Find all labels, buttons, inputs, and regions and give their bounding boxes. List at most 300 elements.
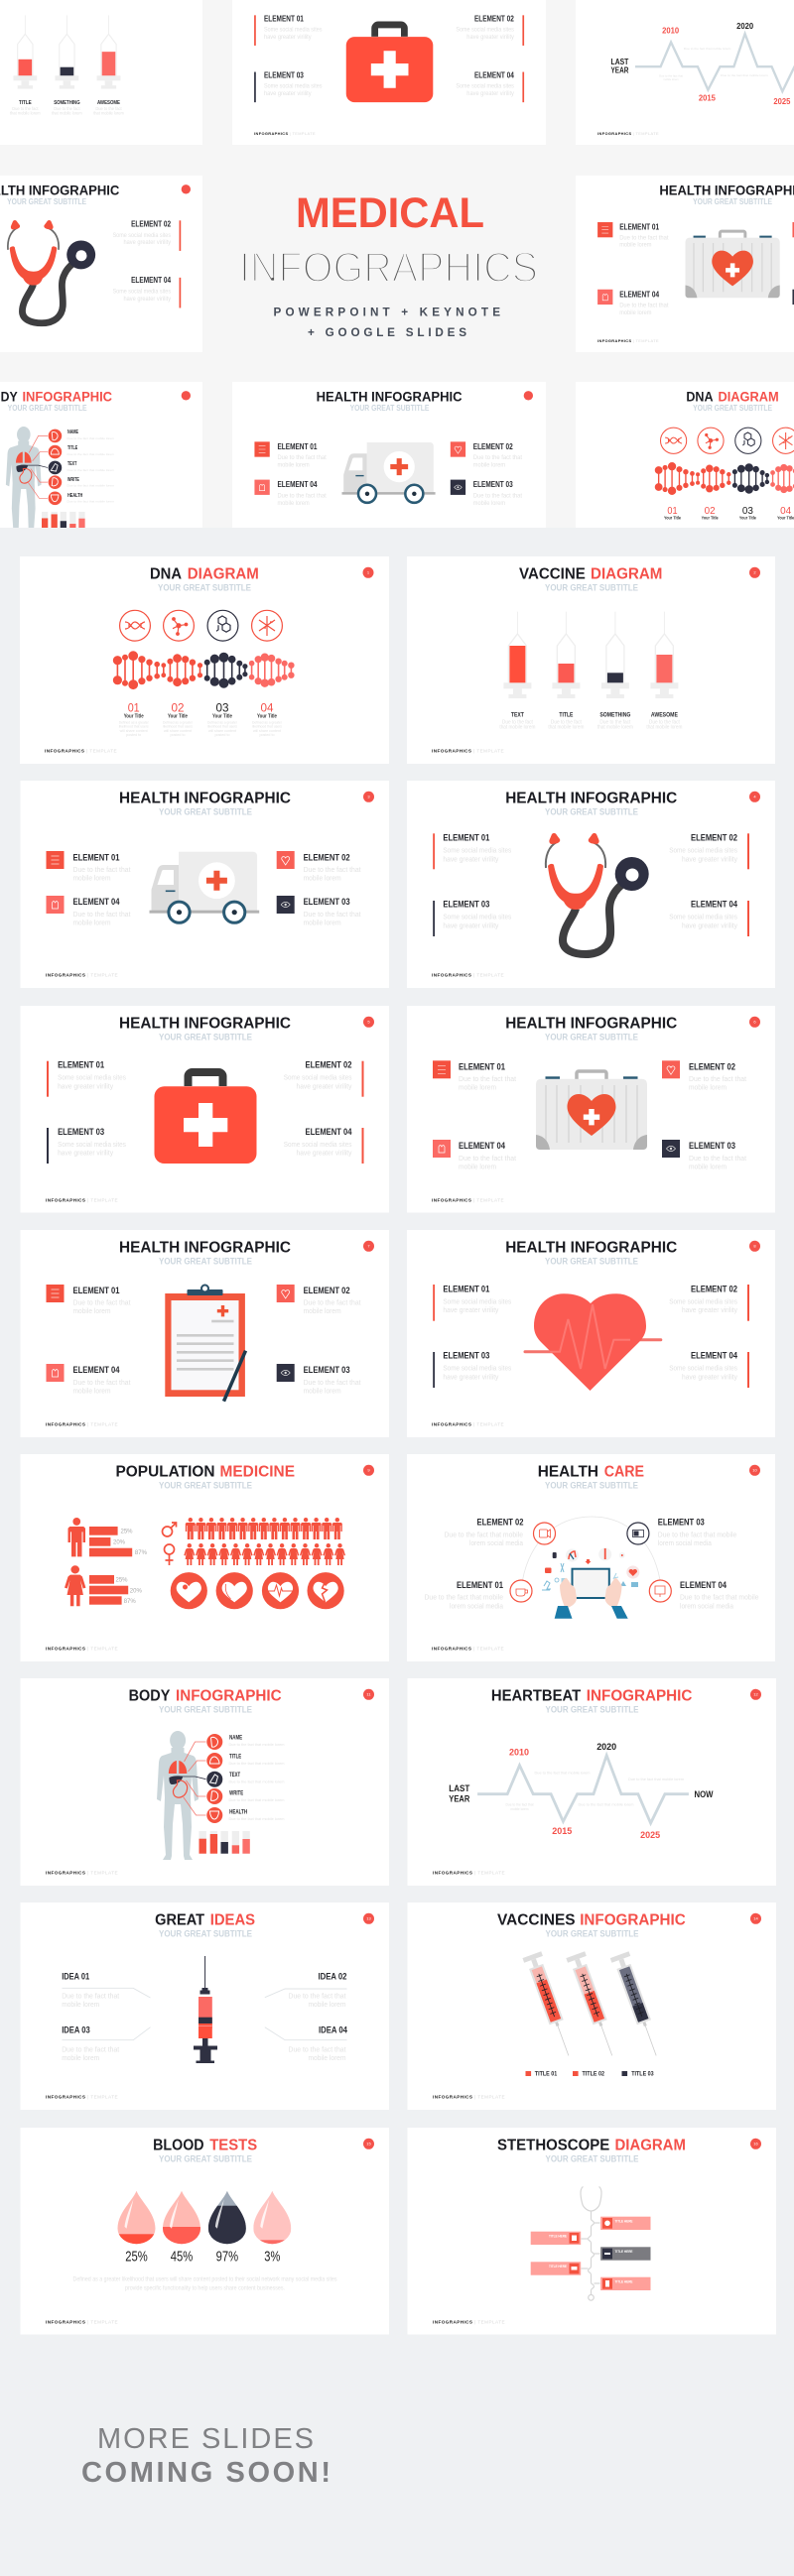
preview: heartbeat slide crop: Due to the fact that bbox=[659, 73, 683, 77]
heading bbox=[505, 791, 677, 816]
preview: suitcase slide crop: INFOGRAPHICS bbox=[597, 338, 631, 343]
preview: DNA slide crop: 04 bbox=[780, 506, 791, 517]
preview: ambulance slide crop: mobile lorem bbox=[277, 500, 310, 507]
clipboard illustration bbox=[165, 1286, 246, 1402]
stethoscope tube bbox=[581, 2186, 601, 2300]
idea texts: IDEA 01 bbox=[62, 1972, 89, 1982]
idea texts: mobile lorem bbox=[62, 2000, 99, 2009]
page number badge bbox=[363, 1017, 374, 1028]
page number badge bbox=[363, 1913, 374, 1924]
preview: heartbeat slide crop: | TEMPLATE bbox=[633, 131, 659, 136]
heading: DNA bbox=[150, 566, 182, 583]
page number badge: 8 bbox=[753, 1244, 756, 1249]
female bars: 87% bbox=[124, 1599, 136, 1605]
heading: BLOOD bbox=[153, 2138, 204, 2154]
heading: YOUR GREAT SUBTITLE bbox=[159, 1032, 252, 1042]
preview: stethoscope slide crop: have greater virility bbox=[123, 296, 172, 303]
preview: suitcase slide crop: Due to the fact that bbox=[619, 235, 669, 242]
element texts: mobile lorem bbox=[73, 919, 111, 927]
page number badge bbox=[750, 2139, 761, 2149]
preview: ambulance slide crop: YOUR GREAT SUBTITLE bbox=[350, 404, 429, 413]
footer: | TEMPLATE bbox=[87, 2095, 118, 2100]
element texts: ELEMENT 03 bbox=[58, 1127, 104, 1137]
title: INFOGRAPHICS: INFOGRAPHICS bbox=[239, 244, 538, 292]
page number badge: 10 bbox=[752, 1468, 757, 1473]
idea texts: IDEA 03 bbox=[62, 2025, 90, 2035]
element texts: Some social media sites bbox=[443, 1296, 511, 1305]
element texts: ELEMENT 02 bbox=[304, 1286, 350, 1295]
element texts: have greater virility bbox=[682, 854, 737, 863]
slide 15: blood tests bbox=[20, 2128, 389, 2335]
step labels: posted to bbox=[171, 733, 185, 737]
element texts: Some social media sites bbox=[443, 913, 511, 921]
step labels: 01 bbox=[128, 700, 140, 714]
heading: HEALTH INFOGRAPHIC bbox=[119, 1240, 291, 1257]
timeline labels: 2025 bbox=[640, 1830, 661, 1841]
element texts: lorem social media bbox=[658, 1538, 712, 1547]
slide 1: DNA diagram bbox=[20, 556, 389, 764]
preview: DNA slide crop: Your Title bbox=[702, 515, 719, 520]
footer bbox=[46, 2320, 118, 2325]
step labels: 04 bbox=[260, 700, 274, 714]
footer: | TEMPLATE bbox=[473, 1422, 504, 1427]
preview: DNA slide crop bbox=[576, 382, 794, 528]
preview: first aid kit slide crop bbox=[232, 0, 546, 145]
preview: vaccine slide crop bbox=[0, 0, 202, 145]
footer bbox=[432, 973, 504, 978]
element texts: lorem social media bbox=[469, 1538, 524, 1547]
footer bbox=[433, 2320, 505, 2325]
heading: HEALTH INFOGRAPHIC bbox=[119, 791, 291, 807]
heading: YOUR GREAT SUBTITLE bbox=[545, 806, 638, 816]
percentages: 97% bbox=[216, 2250, 238, 2266]
page number badge: 6 bbox=[753, 1020, 756, 1025]
preview: first aid kit slide crop: Some social media sites bbox=[264, 83, 322, 90]
preview: first aid kit slide crop: ELEMENT 04 bbox=[474, 70, 514, 79]
step labels: Defined as a greater bbox=[163, 721, 194, 725]
element texts bbox=[58, 1060, 352, 1158]
preview: suitcase slide crop: Due to the fact that bbox=[619, 303, 669, 309]
footer: INFOGRAPHICS bbox=[432, 973, 471, 978]
heading: VACCINES bbox=[497, 1912, 576, 1929]
percentages: 3% bbox=[264, 2250, 280, 2266]
preview: ambulance slide crop: Due to the fact that bbox=[277, 454, 327, 461]
heading: INFOGRAPHIC bbox=[176, 1688, 282, 1705]
heading bbox=[150, 566, 259, 592]
element texts: Due to the fact that mobile bbox=[425, 1593, 503, 1602]
preview: heartbeat slide crop: 2020 bbox=[736, 22, 754, 31]
preview: ambulance slide crop: HEALTH INFOGRAPHIC bbox=[317, 389, 463, 404]
heading: YOUR GREAT SUBTITLE bbox=[546, 1928, 639, 1938]
element texts: Due to the fact that bbox=[304, 1298, 361, 1307]
step labels: Defined as a greater bbox=[119, 721, 149, 725]
element texts: have greater virility bbox=[58, 1081, 113, 1090]
female pictogram row bbox=[184, 1543, 345, 1565]
organ labels: HEALTH bbox=[229, 1809, 247, 1815]
syringe labels: that mobile lorem bbox=[499, 725, 535, 731]
page number badge: 7 bbox=[367, 1244, 370, 1249]
element texts: have greater virility bbox=[443, 1305, 499, 1314]
footer bbox=[46, 1198, 118, 1203]
element texts: Due to the fact that bbox=[73, 865, 131, 874]
preview: first aid kit slide crop: INFOGRAPHICS bbox=[254, 131, 288, 136]
preview: stethoscope slide crop: Some social media sites bbox=[113, 289, 171, 296]
syringe labels: Due to the fact bbox=[502, 719, 533, 725]
preview: vaccine slide crop: Due to the fact bbox=[95, 106, 122, 111]
organ labels: WRITE bbox=[229, 1791, 243, 1797]
element texts: mobile lorem bbox=[304, 1306, 341, 1315]
tagline line one: POWERPOINT + KEYNOTE bbox=[274, 307, 500, 319]
element texts: have greater virility bbox=[443, 920, 499, 929]
syringe labels: Due to the fact bbox=[551, 719, 582, 725]
element texts: Due to the fact that bbox=[73, 1378, 131, 1387]
element icons bbox=[46, 851, 295, 914]
footer: | TEMPLATE bbox=[87, 1422, 118, 1427]
element texts: ELEMENT 01 bbox=[73, 1286, 119, 1295]
preview: suitcase slide crop: mobile lorem bbox=[619, 242, 651, 249]
element texts: Due to the fact that bbox=[304, 910, 361, 919]
blood drops bbox=[117, 2190, 292, 2246]
element texts: Some social media sites bbox=[669, 846, 737, 855]
page number badge: 4 bbox=[753, 795, 756, 799]
preview: first aid kit slide crop: have greater virility bbox=[264, 34, 312, 41]
element texts: mobile lorem bbox=[73, 1387, 111, 1396]
heading bbox=[115, 1464, 295, 1490]
syringe labels bbox=[499, 712, 682, 731]
element texts: Some social media sites bbox=[58, 1073, 126, 1082]
element texts: ELEMENT 03 bbox=[304, 1365, 350, 1375]
percentages: 45% bbox=[171, 2250, 193, 2266]
element texts: ELEMENT 04 bbox=[459, 1141, 506, 1151]
heading bbox=[153, 2138, 257, 2163]
step labels: likelihood that users bbox=[207, 725, 237, 729]
footer bbox=[46, 1647, 118, 1652]
step labels: posted to bbox=[214, 733, 230, 737]
legend: TITLE 02 bbox=[582, 2071, 605, 2077]
timeline labels: Due to the fact that mobile lorem bbox=[534, 1772, 591, 1776]
callout boxes: TITLE HERE bbox=[615, 2219, 633, 2223]
element texts: Due to the fact that bbox=[689, 1154, 747, 1163]
preview: first aid kit slide crop: Some social media sites bbox=[456, 83, 514, 90]
element texts: Some social media sites bbox=[443, 846, 511, 855]
heading: YOUR GREAT SUBTITLE bbox=[159, 2153, 252, 2163]
element texts: mobile lorem bbox=[73, 874, 111, 883]
slide 14: vaccines infographic bbox=[407, 1902, 776, 2110]
preview: heartbeat slide crop: mobile lorem bbox=[663, 77, 679, 81]
heading: INFOGRAPHIC bbox=[587, 1688, 692, 1705]
footer: INFOGRAPHICS bbox=[46, 973, 85, 978]
preview: first aid kit slide crop: Some social media sites bbox=[264, 26, 322, 33]
footer: INFOGRAPHICS bbox=[46, 2095, 85, 2100]
timeline labels bbox=[449, 1742, 714, 1841]
element texts: Due to the fact that bbox=[73, 1298, 131, 1307]
footer: | TEMPLATE bbox=[87, 2320, 118, 2325]
preview: body slide crop: Due to the fact that mobile lorem bbox=[66, 452, 115, 456]
slide 10: health care bbox=[407, 1454, 775, 1661]
element texts: ELEMENT 02 bbox=[304, 852, 350, 862]
page number badge bbox=[749, 567, 760, 578]
element texts: ELEMENT 03 bbox=[658, 1518, 705, 1528]
DNA helix bbox=[113, 652, 294, 689]
callout boxes bbox=[531, 2217, 651, 2290]
element texts: lorem social media bbox=[680, 1601, 734, 1610]
element texts: Due to the fact that bbox=[459, 1154, 517, 1163]
preview: suitcase slide crop: | TEMPLATE bbox=[633, 338, 659, 343]
slide 9: population medicine bbox=[20, 1454, 389, 1661]
slide 13: great ideas bbox=[20, 1902, 389, 2110]
element texts: Due to the fact that bbox=[689, 1074, 747, 1083]
heading: YOUR GREAT SUBTITLE bbox=[545, 1256, 638, 1266]
callout boxes: TITLE HERE bbox=[615, 2250, 633, 2254]
page number badge bbox=[749, 1241, 760, 1252]
heading: YOUR GREAT SUBTITLE bbox=[159, 806, 252, 816]
heading: STETHOSCOPE bbox=[497, 2138, 609, 2154]
syringe labels: TITLE bbox=[559, 712, 573, 718]
element texts: have greater virility bbox=[296, 1081, 352, 1090]
element icons bbox=[433, 1060, 680, 1158]
element texts: Due to the fact that mobile bbox=[658, 1530, 736, 1538]
element texts: ELEMENT 02 bbox=[476, 1518, 524, 1528]
element texts bbox=[443, 1284, 738, 1381]
timeline labels: 2015 bbox=[552, 1826, 573, 1837]
idea texts: mobile lorem bbox=[308, 2053, 345, 2062]
heading: TESTS bbox=[209, 2138, 257, 2154]
female bars: 20% bbox=[130, 1589, 142, 1595]
heading bbox=[491, 1688, 692, 1714]
preview: first aid kit slide crop: ELEMENT 01 bbox=[264, 14, 304, 23]
preview: heartbeat slide crop: LAST bbox=[611, 58, 628, 66]
footer: INFOGRAPHICS bbox=[45, 749, 84, 754]
element texts: ELEMENT 03 bbox=[443, 899, 489, 909]
footer: INFOGRAPHICS bbox=[46, 1422, 85, 1427]
syringes bbox=[503, 612, 678, 698]
page number badge: 2 bbox=[753, 570, 756, 575]
footer: | TEMPLATE bbox=[87, 1647, 118, 1652]
slide 11: body infographic bbox=[20, 1678, 389, 1886]
heading bbox=[119, 791, 291, 816]
step labels: will share content bbox=[120, 729, 148, 733]
preview: ambulance slide crop: ELEMENT 01 bbox=[277, 442, 318, 451]
first aid kit illustration bbox=[155, 1072, 256, 1164]
syringe labels: Due to the fact bbox=[599, 719, 631, 725]
footer: INFOGRAPHICS bbox=[433, 2320, 472, 2325]
more slides line: MORE SLIDES bbox=[97, 2423, 314, 2455]
preview: suitcase slide crop bbox=[576, 176, 794, 352]
step labels: Defined as a greater bbox=[252, 721, 283, 725]
element texts: ELEMENT 02 bbox=[691, 1284, 737, 1293]
element texts: have greater virility bbox=[296, 1149, 352, 1158]
footer: | TEMPLATE bbox=[87, 1198, 118, 1203]
syringe labels: that mobile lorem bbox=[597, 725, 633, 731]
syringe labels: Due to the fact bbox=[649, 719, 680, 725]
heading: YOUR GREAT SUBTITLE bbox=[159, 1256, 252, 1266]
page number badge bbox=[363, 792, 374, 802]
preview: body slide crop: Due to the fact that mobile lorem bbox=[66, 483, 115, 487]
element texts: ELEMENT 04 bbox=[691, 899, 738, 909]
footer: | TEMPLATE bbox=[474, 1871, 505, 1876]
heading: YOUR GREAT SUBTITLE bbox=[159, 1704, 252, 1714]
preview: vaccine slide crop: AWESOME bbox=[97, 100, 120, 106]
element texts: ELEMENT 04 bbox=[306, 1127, 352, 1137]
organ labels: Due to the fact that mobile lorem bbox=[228, 1780, 285, 1784]
element texts: Due to the fact that bbox=[304, 1378, 361, 1387]
heading: VACCINE bbox=[519, 566, 586, 583]
element texts: ELEMENT 01 bbox=[459, 1061, 505, 1071]
male bars: 87% bbox=[135, 1550, 148, 1556]
idea texts: Due to the fact that bbox=[62, 2044, 120, 2053]
syringe labels: that mobile lorem bbox=[646, 725, 682, 731]
preview: vaccine slide crop: TITLE bbox=[19, 100, 32, 106]
slide 4: stethoscope health infographic bbox=[407, 781, 775, 988]
element texts: Some social media sites bbox=[443, 1364, 511, 1373]
footer bbox=[432, 1198, 504, 1203]
heading: CARE bbox=[604, 1464, 644, 1481]
heading: YOUR GREAT SUBTITLE bbox=[546, 2153, 639, 2163]
heading bbox=[155, 1912, 255, 1938]
organ labels bbox=[228, 1735, 285, 1821]
element texts: ELEMENT 04 bbox=[691, 1350, 738, 1360]
step labels: will share content bbox=[164, 729, 192, 733]
element texts: have greater virility bbox=[682, 1372, 737, 1381]
element texts bbox=[443, 832, 738, 929]
footer: | TEMPLATE bbox=[474, 2320, 505, 2325]
preview: DNA slide crop: Your Title bbox=[664, 515, 682, 520]
closing text bbox=[81, 2423, 331, 2489]
preview: DNA slide crop: YOUR GREAT SUBTITLE bbox=[693, 404, 772, 413]
idea texts bbox=[62, 1972, 348, 2062]
heading bbox=[505, 1016, 677, 1042]
footer: | TEMPLATE bbox=[86, 749, 117, 754]
description: Defined as a greater likelihood that users will share content posted to their social network many social media sites bbox=[73, 2277, 337, 2283]
callout boxes: TITLE HERE bbox=[549, 2234, 567, 2238]
page number badge: 14 bbox=[753, 1916, 758, 1921]
footer: INFOGRAPHICS bbox=[432, 749, 471, 754]
heading: POPULATION bbox=[115, 1464, 214, 1481]
slide 8: heart health infographic bbox=[407, 1230, 775, 1437]
footer: | TEMPLATE bbox=[473, 749, 504, 754]
preview: DNA slide crop: 03 bbox=[742, 506, 753, 517]
heading: YOUR GREAT SUBTITLE bbox=[159, 1928, 252, 1938]
heading bbox=[497, 1912, 686, 1938]
preview: ambulance slide crop: Due to the fact that bbox=[473, 492, 522, 499]
preview: ambulance slide crop: Due to the fact that bbox=[277, 492, 327, 499]
element texts: ELEMENT 02 bbox=[691, 832, 737, 842]
preview: first aid kit slide crop: Some social media sites bbox=[456, 26, 514, 33]
timeline labels: NOW bbox=[695, 1789, 714, 1800]
page number badge: 12 bbox=[753, 1692, 758, 1697]
syringe labels: SOMETHING bbox=[599, 712, 631, 718]
male bars: 20% bbox=[113, 1539, 126, 1545]
element texts: mobile lorem bbox=[304, 919, 341, 927]
element texts: have greater virility bbox=[443, 854, 499, 863]
element texts: Due to the fact that mobile bbox=[445, 1530, 523, 1538]
heading bbox=[497, 2138, 686, 2163]
preview: first aid kit slide crop: ELEMENT 03 bbox=[264, 70, 304, 79]
footer: | TEMPLATE bbox=[473, 1198, 504, 1203]
timeline labels: Due to the fact that mobile lorem bbox=[578, 1802, 634, 1806]
syringe illustration bbox=[194, 1956, 217, 2063]
element texts: have greater virility bbox=[58, 1149, 113, 1158]
footer: INFOGRAPHICS bbox=[46, 1647, 85, 1652]
heading: IDEAS bbox=[210, 1912, 255, 1929]
step labels: Defined as a greater bbox=[207, 721, 238, 725]
preview: stethoscope slide crop bbox=[0, 176, 202, 352]
preview: stethoscope slide crop: have greater virility bbox=[123, 239, 172, 246]
organ labels: Due to the fact that mobile lorem bbox=[228, 1743, 285, 1747]
heading: YOUR GREAT SUBTITLE bbox=[545, 582, 638, 592]
page number badge: 9 bbox=[367, 1468, 370, 1473]
preview: first aid kit slide crop: | TEMPLATE bbox=[290, 131, 316, 136]
percentages bbox=[125, 2250, 280, 2266]
preview: body slide crop: HEALTH bbox=[67, 493, 83, 499]
idea texts: IDEA 02 bbox=[318, 1972, 347, 1982]
heading: HEALTH INFOGRAPHIC bbox=[505, 1240, 677, 1257]
tagline line two: + GOOGLE SLIDES bbox=[308, 326, 466, 339]
element texts: mobile lorem bbox=[689, 1082, 727, 1091]
preview: suitcase slide crop: ELEMENT 01 bbox=[619, 223, 660, 232]
preview: body slide crop: WRITE bbox=[67, 477, 79, 483]
main title block bbox=[239, 189, 538, 339]
preview: ambulance slide crop bbox=[232, 382, 546, 528]
preview: suitcase slide crop: YOUR GREAT SUBTITLE bbox=[693, 197, 772, 206]
heart badges bbox=[171, 1572, 344, 1609]
element texts bbox=[73, 852, 361, 927]
preview: stethoscope slide crop: YOUR GREAT SUBTITLE bbox=[7, 197, 86, 206]
connector lines bbox=[62, 1988, 347, 2040]
page number badge: 3 bbox=[367, 795, 370, 799]
footer: | TEMPLATE bbox=[473, 973, 504, 978]
element texts: mobile lorem bbox=[304, 1387, 341, 1396]
preview: heartbeat slide crop: Due to the fact that mobile lorem bbox=[721, 73, 768, 77]
pulse timeline line bbox=[477, 1756, 689, 1823]
step labels bbox=[119, 700, 283, 737]
element texts: ELEMENT 03 bbox=[443, 1350, 489, 1360]
element texts: ELEMENT 04 bbox=[680, 1580, 728, 1590]
footer: INFOGRAPHICS bbox=[433, 2095, 472, 2100]
heading bbox=[119, 1240, 291, 1266]
preview: ambulance slide crop: ELEMENT 02 bbox=[473, 442, 513, 451]
element texts: mobile lorem bbox=[459, 1082, 496, 1091]
slide 5: first aid kit health infographic bbox=[20, 1006, 389, 1212]
preview: vaccine slide crop: Due to the fact bbox=[54, 106, 80, 111]
accent bars bbox=[433, 1285, 749, 1388]
footer: INFOGRAPHICS bbox=[432, 1422, 471, 1427]
description: provide specific functionality to help users share content businesses. bbox=[125, 2285, 285, 2291]
preview: body slide crop: Due to the fact that mobile lorem bbox=[66, 436, 115, 440]
element texts: ELEMENT 02 bbox=[689, 1061, 735, 1071]
preview: body slide crop bbox=[0, 382, 202, 528]
footer bbox=[432, 749, 504, 754]
idea texts: mobile lorem bbox=[62, 2053, 99, 2062]
footer: | TEMPLATE bbox=[473, 1647, 504, 1652]
legend: TITLE 01 bbox=[535, 2071, 558, 2077]
element texts bbox=[459, 1061, 747, 1171]
preview: first aid kit slide crop: have greater virility bbox=[466, 34, 515, 41]
element texts bbox=[425, 1518, 758, 1610]
element texts: lorem social media bbox=[450, 1601, 504, 1610]
preview: first aid kit slide crop: ELEMENT 02 bbox=[474, 14, 514, 23]
preview: first aid kit slide crop: have greater virility bbox=[466, 90, 515, 97]
element icons bbox=[46, 1285, 295, 1382]
slide 12: heartbeat infographic bbox=[407, 1678, 776, 1886]
footer: | TEMPLATE bbox=[87, 973, 118, 978]
preview: body slide crop: Due to the fact that mobile lorem bbox=[66, 468, 115, 472]
preview: DNA slide crop: Your Title bbox=[739, 515, 756, 520]
element texts: ELEMENT 01 bbox=[457, 1580, 503, 1590]
footer bbox=[432, 1422, 504, 1427]
organ labels: TEXT bbox=[229, 1773, 240, 1779]
preview: DNA slide crop: DNA bbox=[686, 389, 714, 404]
